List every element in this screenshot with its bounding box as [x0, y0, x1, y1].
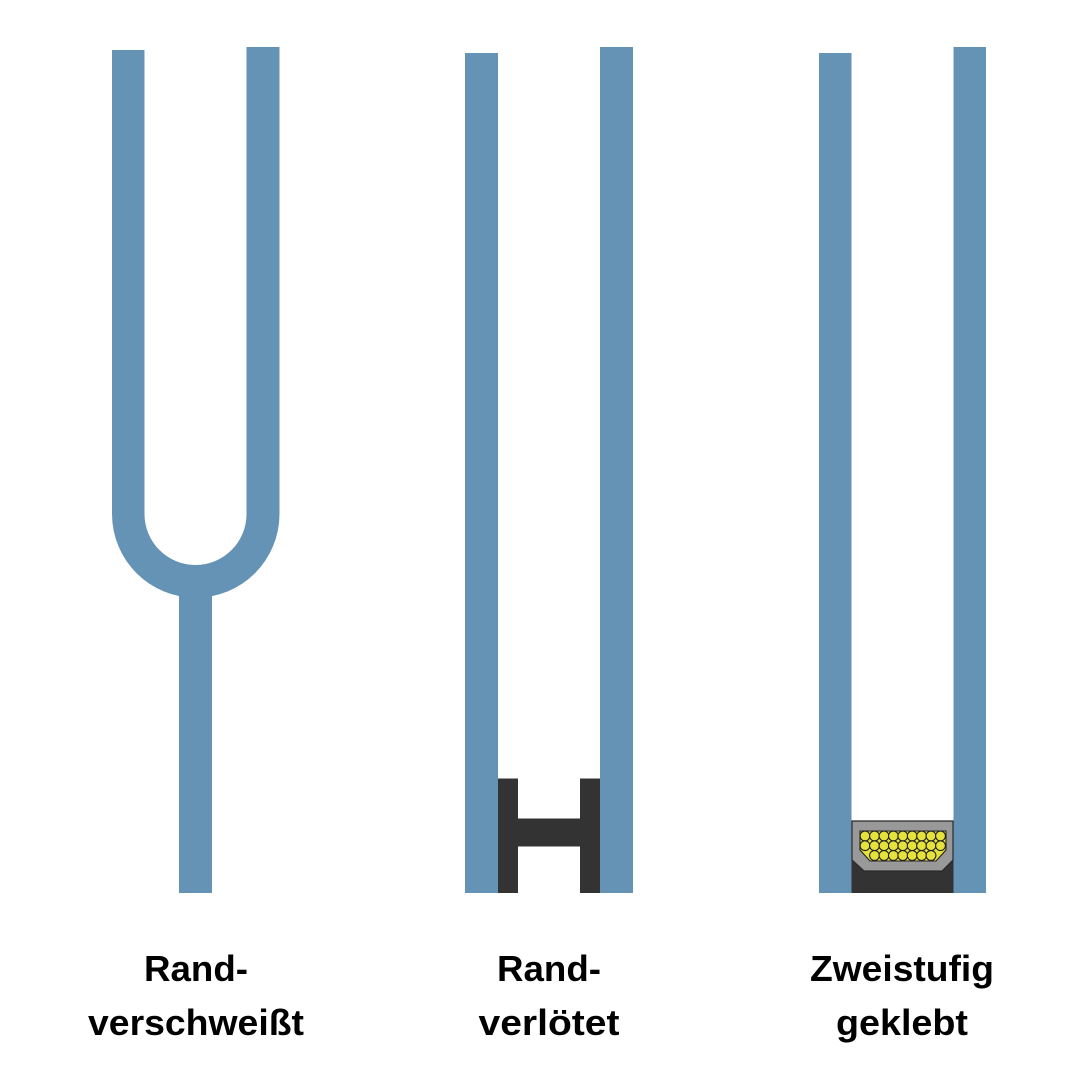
panel: edge-soldered glazing — [465, 47, 633, 893]
grey spacer — [852, 821, 953, 871]
label: Zweistufig geklebt: geklebt — [836, 1002, 968, 1043]
label: Rand-verschweißt — [88, 948, 304, 1043]
right glass pane — [954, 47, 986, 893]
welded U-shaped edge — [112, 514, 280, 598]
label: Zweistufig geklebt — [810, 948, 994, 1043]
yellow desiccant beads — [860, 831, 946, 861]
label: Rand-verlötet — [478, 948, 620, 1043]
stem — [179, 590, 212, 893]
label: Rand-verschweißt: verschweißt — [88, 1002, 304, 1043]
panel: edge-welded glazing — [112, 47, 280, 893]
label: Rand-verschweißt: Rand- — [144, 948, 248, 989]
dark secondary sealant — [852, 850, 954, 893]
left glass pane — [465, 53, 498, 893]
left glass pane — [819, 53, 852, 893]
panel: two-stage bonded glazing — [819, 47, 986, 893]
right glass pane — [246, 47, 280, 514]
right glass pane — [600, 47, 633, 893]
label: Zweistufig geklebt: Zweistufig — [810, 948, 994, 989]
label: Rand-verlötet: Rand- — [497, 948, 601, 989]
H-shaped solder seal — [498, 778, 600, 893]
label: Rand-verlötet: verlötet — [478, 1002, 620, 1043]
left glass pane — [112, 50, 144, 514]
